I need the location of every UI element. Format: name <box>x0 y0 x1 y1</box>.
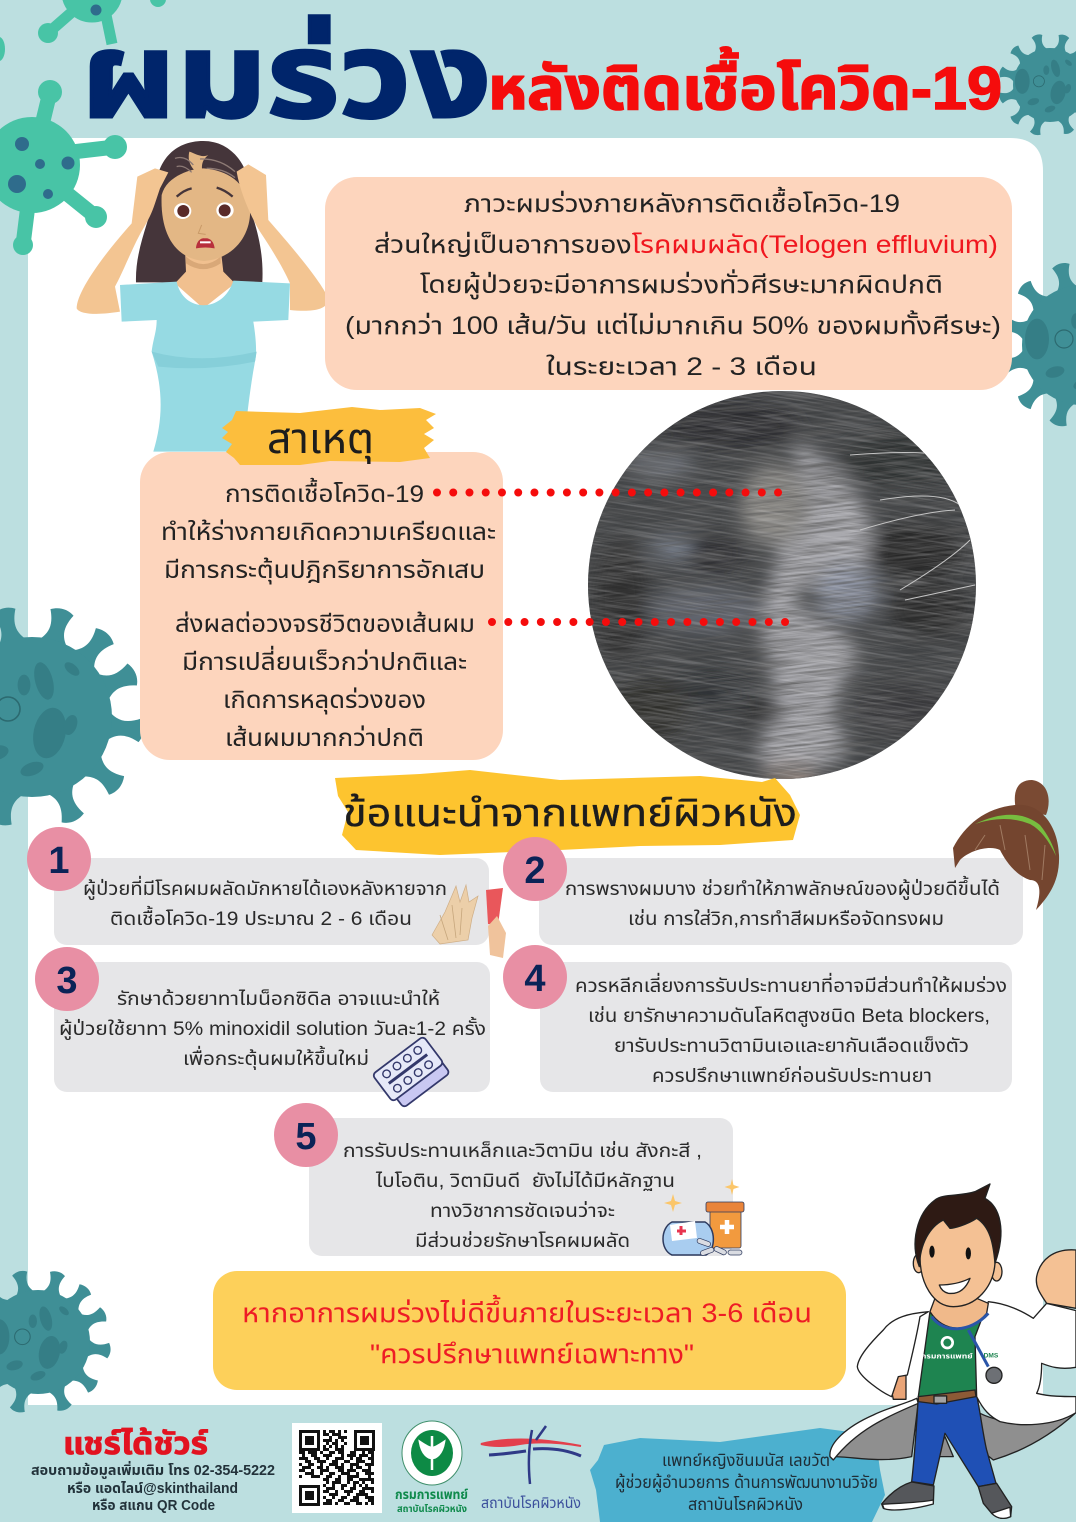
author lines <box>615 1451 878 1514</box>
number badge 1 <box>27 827 91 891</box>
illustration: superhero doctor: กรมการแพทย์ <box>921 1352 973 1361</box>
card 2 text: เช่น การใส่วิก,การทำสีผมหรือจัดทรงผม <box>628 907 944 930</box>
card 2 text <box>565 875 1000 930</box>
author credit <box>590 1428 885 1522</box>
callout: see a specialist <box>213 1271 846 1390</box>
card 1 text: ผู้ป่วยที่มีโรคผมผลัดมักหายได้เองหลังหายจาก <box>83 875 447 901</box>
logo caption: สถาบันโรคผิวหนัง <box>397 1503 467 1515</box>
virus: right middle <box>997 260 1076 429</box>
icon: pill blister <box>372 1036 450 1108</box>
card 5 text: การรับประทานเหล็กและวิตามิน เช่น สังกะสี , <box>343 1139 702 1162</box>
card 4 text: เช่น ยารักษาความดันโลหิตสูงชนิด Beta blockers, <box>588 1004 990 1028</box>
logo caption <box>395 1487 468 1515</box>
footer contact block <box>31 1426 275 1514</box>
card 3 text: ผู้ป่วยใช้ยาทา 5% minoxidil solution วันละ1-2 ครั้ง <box>59 1016 486 1041</box>
intro lines: โดยผู้ป่วยจะมีอาการผมร่วงทั่วศีรษะมากผิดปกติ <box>420 268 943 300</box>
causes lines <box>161 477 496 752</box>
virus: bottom left <box>0 1268 112 1415</box>
illustration: superhero doctor <box>830 1184 1076 1518</box>
number badge 2 <box>503 837 567 901</box>
card 5 text: ไบโอติน, วิตามินดี ยังไม่ได้มีหลักฐาน <box>375 1169 675 1192</box>
advice card 1 <box>27 827 506 958</box>
advice card 2 <box>503 837 1023 945</box>
logo caption: กรมการแพทย์ <box>395 1487 468 1502</box>
card 5 text <box>343 1139 702 1252</box>
intro lines <box>345 186 1001 381</box>
card 3 text <box>59 987 486 1070</box>
causes lines: เกิดการหลุดร่วงของ <box>223 686 426 715</box>
number badge 5 <box>274 1103 338 1167</box>
number badge 3 <box>35 947 99 1011</box>
card 4 text: ควรหลีกเลี่ยงการรับประทานยาที่อาจมีส่วนทำให้ผมร่วง <box>575 972 1007 997</box>
illustration: worried woman <box>77 141 328 452</box>
author lines: แพทย์หญิงชินมนัส เลขวัต <box>662 1451 830 1470</box>
author lines: ผู้ช่วยผู้อำนวยการ ด้านการพัฒนางานวิจัย <box>615 1472 878 1494</box>
number badge 4: 4 <box>524 958 546 1000</box>
card 2 text: การพรางผมบาง ช่วยทำให้ภาพลักษณ์ของผู้ป่วยดีขึ้นได้ <box>565 875 1000 901</box>
causes lines: การติดเชื้อโควิด-19 <box>225 477 424 508</box>
icon: medicine bottle and pills <box>663 1179 744 1256</box>
logo: Department of Medical Services <box>395 1421 468 1515</box>
causes title text: สาเหตุ <box>267 415 374 464</box>
card 5 text: ทางวิชาการชัดเจนว่าจะ <box>430 1199 615 1222</box>
number badge 4 <box>503 945 567 1009</box>
callout text: หากอาการผมร่วงไม่ดีขึ้นภายในระยะเวลา 3-6 เดือน <box>242 1294 812 1328</box>
card 3 text: รักษาด้วยยาทาไมน็อกซิดิล อาจแนะนำให้ <box>117 987 440 1010</box>
advice title text: ข้อแนะนำจากแพทย์ผิวหนัง <box>343 793 797 835</box>
virus: left edge small <box>0 37 5 61</box>
advice card 3 <box>35 947 490 1108</box>
virus: top left <box>38 0 166 44</box>
causes lines: มีการเปลี่ยนเร็วกว่าปกติและ <box>182 645 467 676</box>
card 1 text: ติดเชื้อโควิด-19 ประมาณ 2 - 6 เดือน <box>110 905 412 930</box>
advice card 4 <box>503 945 1012 1092</box>
dotted connector 2 <box>492 618 788 626</box>
panel: causes <box>140 452 503 760</box>
author lines: สถาบันโรคผิวหนัง <box>688 1495 803 1514</box>
callout text <box>242 1294 812 1369</box>
card 1 text <box>83 875 447 930</box>
share slogan: แชร์ได้ชัวร์ <box>63 1426 208 1461</box>
contact lines <box>31 1460 275 1514</box>
white content panel <box>28 138 1043 1405</box>
intro lines: ภาวะผมร่วงภายหลังการติดเชื้อโควิด-19 <box>464 186 900 218</box>
contact lines: หรือ สแกน QR Code <box>92 1498 215 1514</box>
virus: top right <box>998 33 1076 137</box>
intro lines: ส่วนใหญ่เป็นอาการของ โรคผมผลัด(Telogen effluvium) <box>374 231 998 259</box>
intro lines: ในระยะเวลา 2 - 3 เดือน <box>546 353 817 381</box>
panel: intro text <box>325 177 1012 390</box>
number badge 3: 3 <box>56 960 78 1002</box>
dotted connector 1 <box>437 488 780 496</box>
number badge 2: 2 <box>524 850 546 892</box>
callout text: "ควรปรึกษาแพทย์เฉพาะทาง" <box>370 1339 694 1369</box>
contact lines: สอบถามข้อมูลเพิ่มเติม โทร 02-354-5222 <box>31 1460 275 1480</box>
heading: causes <box>222 407 436 465</box>
card 4 text: ยารับประทานวิตามินเอและยากันเลือดแข็งตัว <box>614 1036 969 1057</box>
advice card 5 <box>274 1103 744 1256</box>
photo: scalp with hair loss <box>588 391 976 779</box>
main title: ผมร่วง <box>81 10 491 143</box>
logo caption: สถาบันโรคผิวหนัง <box>481 1495 581 1512</box>
logo: Institute of Dermatology <box>481 1426 581 1512</box>
contact lines: หรือ แอดไลน์@skinthailand <box>67 1481 238 1497</box>
heading: doctor advice <box>335 770 800 855</box>
virus: left middle <box>0 604 146 830</box>
illustration: superhero doctor: DMS <box>984 1354 998 1360</box>
title <box>81 10 1002 143</box>
intro lines: (มากกว่า 100 เส้น/วัน แต่ไม่มากเกิน 50% ของผมทั้งศีรษะ) <box>345 309 1001 340</box>
card 4 text <box>575 972 1007 1087</box>
subtitle: หลังติดเชื้อโควิด-19 <box>488 46 1002 122</box>
card 3 text: เพื่อกระตุ้นผมให้ขึ้นใหม่ <box>183 1045 369 1070</box>
card 4 text: ควรปรึกษาแพทย์ก่อนรับประทานยา <box>652 1064 932 1087</box>
causes lines: มีการกระตุ้นปฎิกริยาการอักเสบ <box>164 557 485 585</box>
number badge 1: 1 <box>48 840 70 882</box>
icon: hair bun <box>953 780 1059 910</box>
icon: hand with comb <box>432 885 506 958</box>
card 5 text: มีส่วนช่วยรักษาโรคผมผลัด <box>415 1229 630 1252</box>
causes lines: ส่งผลต่อวงจรชีวิตของเส้นผม <box>175 610 475 638</box>
number badge 5: 5 <box>295 1116 317 1158</box>
causes lines: เส้นผมมากกว่าปกติ <box>225 724 424 752</box>
virus: left large <box>0 80 127 255</box>
causes lines: ทำให้ร่างกายเกิดความเครียดและ <box>161 518 496 546</box>
QR code <box>292 1423 382 1513</box>
